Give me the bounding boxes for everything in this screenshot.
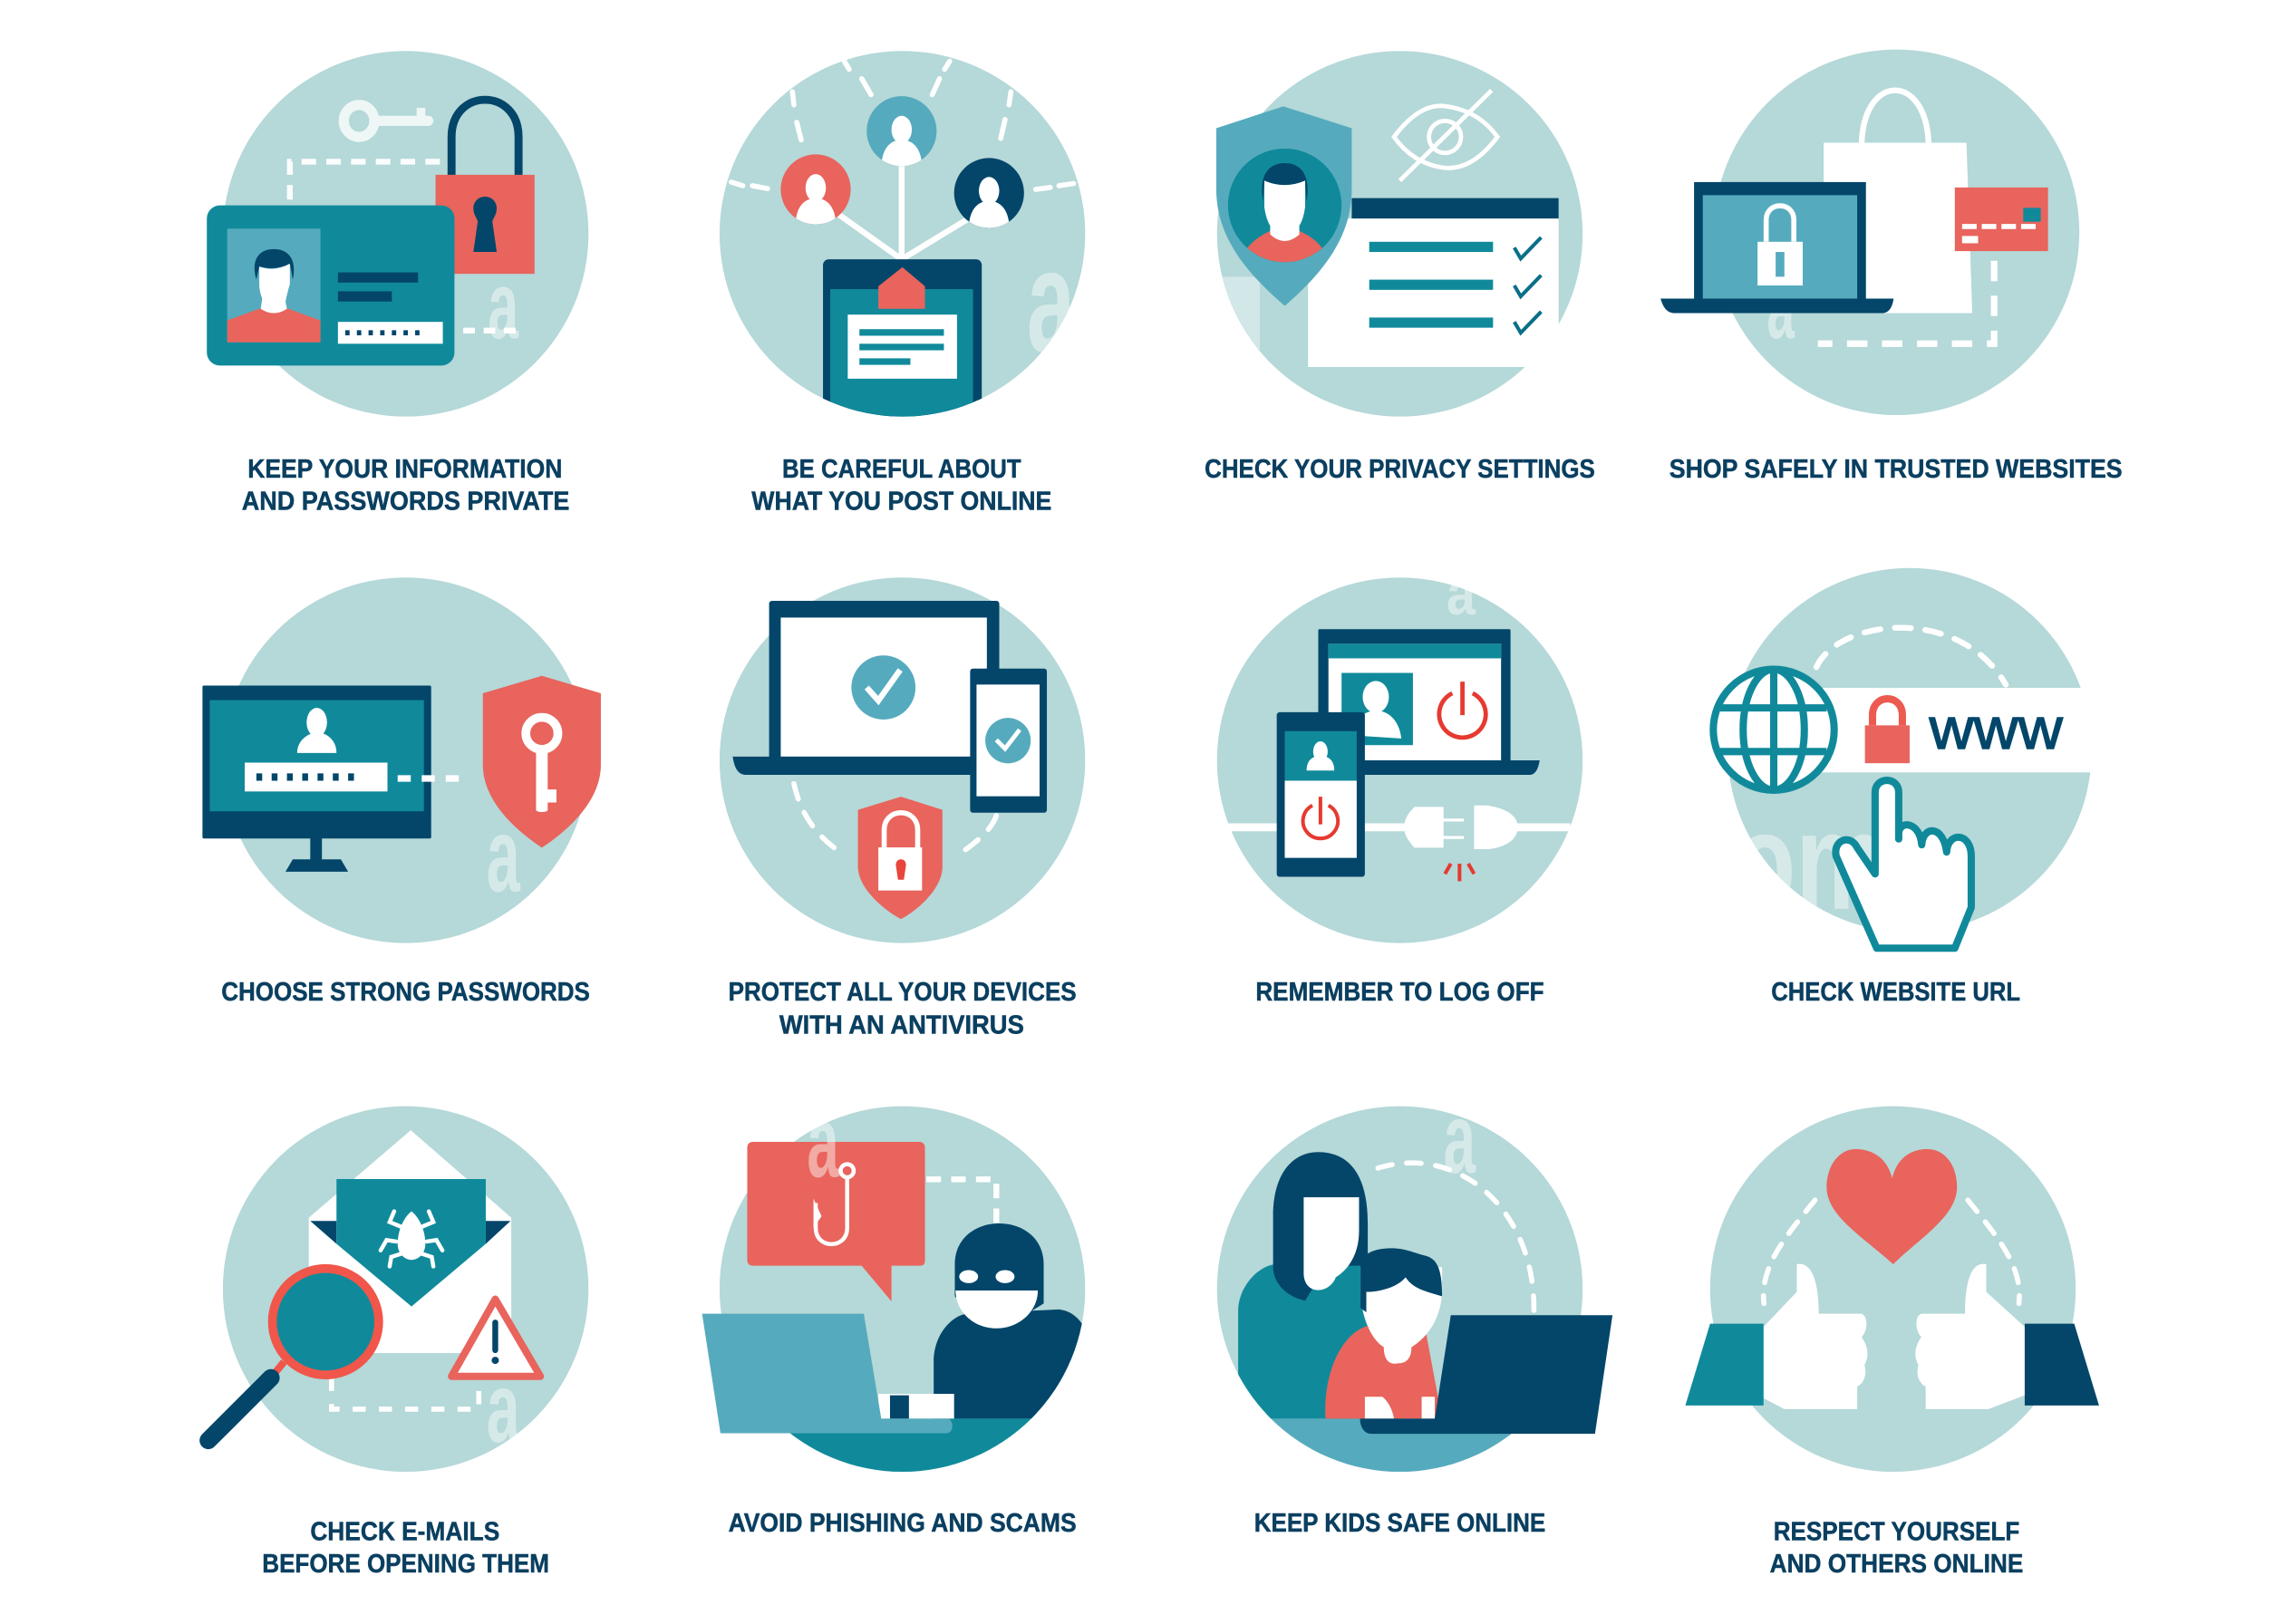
caption: protect devices: WITH AN ANTIVIRUS xyxy=(779,1010,1024,1039)
icon: crossed-out eye xyxy=(1394,91,1497,180)
watermark: a xyxy=(1444,1084,1476,1194)
icon: monitor login xyxy=(202,685,431,872)
settings window xyxy=(1308,198,1559,367)
background circle xyxy=(223,577,588,943)
dashes xyxy=(398,777,466,780)
panel: protect all devices xyxy=(720,577,1085,943)
phone xyxy=(1277,712,1365,877)
address bar xyxy=(1792,688,2105,772)
panel: avoid phishing xyxy=(702,1106,1086,1472)
ID card xyxy=(207,206,454,365)
dashed arc xyxy=(1816,628,2006,684)
teal floor xyxy=(790,1418,1031,1472)
caption: check e-mails xyxy=(262,1518,549,1579)
caption: be careful: BE CAREFUL ABOUT xyxy=(782,455,1021,484)
panel: check website URL xyxy=(1713,568,2105,948)
dashes and watermark: a xyxy=(488,253,519,359)
caption: protect devices xyxy=(729,978,1077,1039)
caption: keep your information xyxy=(242,455,569,517)
caption: phishing: AVOID PHISHING AND SCAMS xyxy=(729,1509,1077,1538)
laptop xyxy=(1318,629,1540,775)
burglar xyxy=(934,1223,1085,1418)
www text: www xyxy=(1929,696,2063,761)
icon: pointing hand xyxy=(1835,780,1971,948)
icon: lock xyxy=(1865,699,1910,763)
watermark: a xyxy=(1766,257,1795,358)
cord xyxy=(1228,825,1570,830)
dashed arcs xyxy=(1764,1200,2019,1303)
icon: key xyxy=(344,105,428,137)
credit card xyxy=(1955,188,2048,251)
left thumbs up xyxy=(1685,1264,1867,1409)
caption: be careful xyxy=(751,455,1051,517)
caption: respect xyxy=(1770,1518,2023,1579)
panel: be careful what you post xyxy=(720,51,1085,435)
phone with post xyxy=(823,259,1069,417)
avatar: coral xyxy=(780,154,851,227)
icon: envelope with bug xyxy=(309,1130,511,1353)
dashed rays xyxy=(731,62,1073,189)
icon: magnifying glass xyxy=(208,1269,379,1440)
icon: globe xyxy=(1713,669,1834,790)
icon: shopping bag xyxy=(1824,91,1972,314)
dashed connector xyxy=(926,1179,996,1223)
icon: warning triangle xyxy=(451,1300,540,1377)
sparks xyxy=(1445,864,1474,881)
speech bubble with hook xyxy=(747,1085,925,1301)
background circle xyxy=(223,1107,588,1472)
plug xyxy=(1404,806,1518,849)
background circle xyxy=(223,51,588,417)
shield with user xyxy=(1216,106,1351,306)
background circle xyxy=(1217,577,1582,943)
avatar: navy xyxy=(954,158,1024,230)
speech bubble with hook: a xyxy=(807,1085,840,1199)
caption: kids safe: KEEP KIDS SAFE ONLINE xyxy=(1254,1509,1545,1538)
laptop xyxy=(732,601,999,775)
caption: website url: CHECK WEBSITE URL xyxy=(1771,978,2020,1007)
laptop xyxy=(1360,1315,1612,1434)
panel: shop safely xyxy=(1660,50,2079,415)
caption: keep your information: AND PASSWORDS PRIVATE xyxy=(242,488,569,517)
dashed arcs xyxy=(794,784,996,855)
caption: log off: REMEMBER TO LOG OFF xyxy=(1255,978,1544,1007)
laptop and hands xyxy=(702,1314,954,1433)
connecting lines xyxy=(836,158,969,259)
icon: padlock xyxy=(436,100,535,274)
dashed connector xyxy=(332,1378,479,1409)
watermark: a xyxy=(487,1353,520,1464)
phone with post: a xyxy=(1027,220,1076,382)
panel: keep your information private xyxy=(207,51,588,417)
laptop with lock xyxy=(1660,182,1893,314)
panel: check your privacy settings xyxy=(1216,51,1582,417)
caption: privacy settings: CHECK YOUR PRIVACY SETTINGS xyxy=(1205,455,1595,484)
background circle xyxy=(720,1107,1085,1472)
caption: be careful: WHAT YOU POST ONLINE xyxy=(751,488,1051,517)
phone xyxy=(970,669,1047,813)
background circle xyxy=(1728,568,2092,933)
panel: keep kids safe xyxy=(1216,1106,1613,1472)
background circle xyxy=(1710,1107,2076,1472)
dashes and watermark xyxy=(463,253,519,359)
panel: choose strong passwords xyxy=(202,577,601,943)
avatar: teal xyxy=(866,96,936,169)
shield with key xyxy=(483,676,601,847)
background circle xyxy=(1714,50,2079,415)
caption: protect devices: PROTECT ALL YOUR DEVICES xyxy=(729,978,1077,1007)
caption: keep your information: KEEP YOUR INFORMATION xyxy=(247,455,562,484)
panel: respect yourself xyxy=(1685,1107,2099,1472)
watermark: a xyxy=(1447,560,1476,628)
caption: check e-mails: CHECK E-MAILS xyxy=(310,1518,499,1547)
icon: heart xyxy=(1826,1149,1957,1264)
dashed arc xyxy=(1378,1163,1534,1314)
watermark bars xyxy=(1221,276,1260,350)
background circle xyxy=(1217,51,1582,417)
dashed connector xyxy=(290,161,440,199)
caption: check e-mails: BEFORE OPENING THEM xyxy=(262,1550,549,1579)
background circle xyxy=(720,577,1085,943)
dashed connector xyxy=(1818,261,1994,343)
caption: respect: RESPECT YOURSELF xyxy=(1774,1518,2019,1547)
caption: respect: AND OTHERS ONLINE xyxy=(1770,1550,2023,1579)
panel: check e-mails xyxy=(208,1107,588,1472)
child xyxy=(1325,1248,1442,1418)
caption: strong passwords: CHOOSE STRONG PASSWORDS xyxy=(221,978,590,1007)
background circle xyxy=(1217,1107,1582,1472)
background circle xyxy=(720,51,1085,417)
panel: remember to log off xyxy=(1217,560,1582,943)
caption: shop safely: SHOP SAFELY IN TRUSTED WEBSITES xyxy=(1669,455,2123,484)
floor and mother xyxy=(1238,1152,1512,1472)
right thumbs up xyxy=(1915,1264,2099,1409)
watermark: a xyxy=(487,797,521,914)
shield with lock xyxy=(858,797,943,919)
watermark: om xyxy=(1733,785,1886,939)
